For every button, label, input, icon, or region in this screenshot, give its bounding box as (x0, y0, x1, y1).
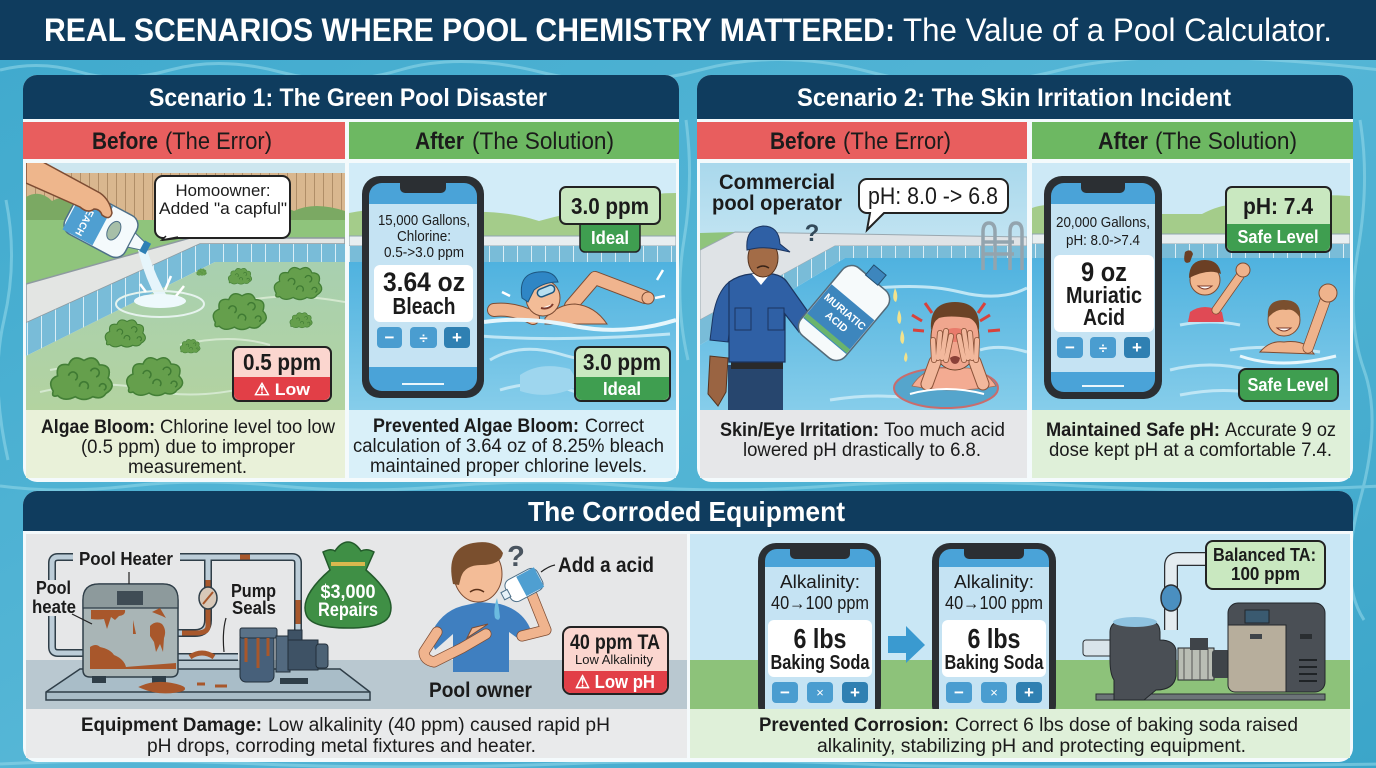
scene: kids in safe pool (1032, 163, 1350, 410)
phone: muriatic acid calculator: Acid (1083, 304, 1125, 330)
clean pipe (1161, 559, 1207, 630)
irritated swimmer (894, 302, 1000, 408)
badge: 0.5 ppm low: ⚠ Low (254, 380, 311, 399)
caption: prevented corrosion: Prevented Corrosion: (759, 715, 949, 736)
tag: 3.0 ppm ideal top (560, 187, 660, 252)
caption: skin eye irritation (700, 410, 1027, 478)
question mark: ? (805, 220, 819, 247)
tag: safe level (1239, 369, 1338, 401)
heater unit (1228, 603, 1325, 692)
before header bar (697, 122, 1027, 159)
caption: prevented corrosion: alkalinity, stabilizing pH and protecting equipment. (817, 736, 1246, 757)
icon: acid bottle in hand (497, 566, 546, 607)
phone: muriatic acid calculator (1044, 176, 1162, 399)
algae clumps (51, 267, 322, 399)
phone: baking soda 2: Baking Soda (944, 652, 1044, 674)
caption: algae bloom (26, 410, 345, 478)
after header bar: After (415, 128, 464, 155)
arrow between phones (888, 626, 925, 663)
operator figure (708, 226, 808, 410)
inlet stub (1083, 640, 1113, 656)
panel: corroded equipment (23, 491, 1353, 762)
speech bubble: pH drop (859, 179, 1008, 230)
caption: maintained safe pH: Accurate 9 oz (1225, 420, 1336, 441)
corroded pipes (52, 557, 298, 657)
caption: algae bloom: Algae Bloom: (41, 417, 155, 438)
tag: 3.0 ppm ideal bottom (575, 347, 670, 401)
phone: baking soda 1: − (780, 683, 790, 702)
phone: baking soda 1: Baking Soda (770, 652, 870, 674)
phone: chlorine calculator: Chlorine: (397, 228, 451, 245)
before header bar: (The Error) (165, 128, 272, 155)
after header bar (1032, 122, 1353, 159)
after header bar: After (1098, 128, 1148, 155)
tag: safe level: Safe Level (1248, 375, 1328, 395)
phone: baking soda 2 (932, 543, 1056, 723)
after header bar: (The Solution) (1155, 128, 1297, 155)
pump body (1110, 618, 1176, 700)
label: pool owner: Pool owner (429, 679, 532, 702)
equipment labels: Pump (231, 581, 276, 601)
caption: prevented corrosion (690, 709, 1350, 758)
icon: muriatic acid jug: MURIATIC (821, 291, 868, 333)
phone: baking soda 1: + (850, 683, 860, 702)
icon: bleach bottle (62, 202, 151, 258)
phone: muriatic acid calculator: 9 oz (1081, 257, 1127, 287)
badge: 40 ppm TA: 40 ppm TA (570, 631, 660, 654)
caption: prevented algae bloom: calculation of 3.64 oz of 8.25% bleach (353, 436, 664, 457)
icon: bleach bottle: BLEACH (72, 195, 102, 237)
acid drops (893, 288, 908, 362)
caption: equipment damage: pH drops, corroding metal fixtures and heater. (147, 736, 536, 757)
phone: chlorine calculator: 3.64 oz (383, 267, 465, 297)
phone: muriatic acid calculator: + (1132, 338, 1142, 357)
tag: balanced TA: 100 ppm (1231, 564, 1300, 584)
before header bar: Before (770, 128, 836, 155)
operator label: pool operator (712, 192, 842, 215)
before header bar: Before (92, 128, 158, 155)
badge: 40 ppm TA: Low Alkalinity (575, 652, 653, 667)
clean pump and heater (1083, 559, 1325, 700)
phone: chlorine calculator: ÷ (419, 330, 428, 347)
before header bar: (The Error) (843, 128, 951, 155)
phone: muriatic acid calculator: 20,000 Gallons, (1056, 214, 1150, 231)
caption: prevented algae bloom (349, 410, 676, 478)
caption: skin eye irritation: Too much acid (884, 420, 1005, 441)
tag: 3.0 ppm ideal top: Ideal (591, 228, 629, 248)
title banner: REAL SCENARIOS WHERE POOL CHEMISTRY MATTERED: (44, 12, 895, 48)
tag: balanced TA (1206, 541, 1325, 589)
tag: pH 7.4 safe level: pH: 7.4 (1243, 193, 1313, 219)
badge: 0.5 ppm low: 0.5 ppm (243, 349, 321, 375)
tag: 3.0 ppm ideal bottom: 3.0 ppm (583, 349, 661, 375)
caption: algae bloom: measurement. (128, 457, 247, 478)
swimmer figure (484, 270, 676, 330)
caption: equipment damage: Equipment Damage: (81, 715, 262, 736)
caption: maintained safe pH: Maintained Safe pH: (1046, 420, 1220, 441)
icon: muriatic acid jug: ACID (823, 309, 850, 335)
equipment labels: heate (32, 597, 76, 617)
after header bar (349, 122, 679, 159)
money bag: repairs (305, 542, 391, 628)
phone: baking soda 2: 40→100 ppm (945, 593, 1043, 613)
pool owner figure: ? (507, 541, 525, 573)
pouring stream and splash (116, 246, 204, 317)
caption: equipment damage (26, 709, 687, 758)
caption: prevented algae bloom: Prevented Algae Bloom: (373, 416, 579, 437)
phone: baking soda 2: 6 lbs (968, 623, 1020, 654)
valve gauge (199, 587, 217, 609)
phone: chlorine calculator: + (452, 328, 462, 347)
before scene: damaged equipment (26, 534, 687, 709)
equipment labels: Pool (36, 578, 71, 598)
equipment labels: Pool Heater (79, 549, 173, 569)
phone: muriatic acid calculator: − (1065, 338, 1075, 357)
after header bar: (The Solution) (472, 128, 614, 155)
corroded pump (240, 628, 328, 684)
phone: chlorine calculator: 15,000 Gallons, (378, 212, 470, 229)
phone: muriatic acid calculator: Muriatic (1066, 282, 1142, 308)
phone: baking soda 1: 40→100 ppm (771, 593, 869, 613)
corroded equipment heading: The Corroded Equipment (528, 496, 845, 527)
title banner (0, 0, 1376, 60)
scene: homeowner pouring into green pool (26, 161, 345, 410)
caption: algae bloom: (0.5 ppm) due to improper (81, 437, 296, 458)
tag: 3.0 ppm ideal bottom: Ideal (603, 379, 641, 399)
label: add a acid: Add a acid (558, 554, 654, 577)
icon: pool ladder (983, 223, 1022, 270)
scene: swimmer in balanced pool (349, 163, 676, 410)
title banner: The Value of a Pool Calculator. (903, 12, 1332, 48)
equipment labels: Seals (232, 598, 276, 618)
phone: baking soda 2: Alkalinity: (954, 572, 1034, 592)
tag: pH 7.4 safe level: Safe Level (1238, 227, 1318, 247)
speech bubble: pH drop: pH: 8.0 -> 6.8 (868, 183, 998, 210)
panel: scenario 1 (23, 75, 679, 482)
phone: baking soda 2: − (954, 683, 964, 702)
speech bubble: homeowner: Homoowner: (176, 181, 270, 200)
caption: prevented algae bloom: Correct (585, 416, 645, 437)
equipment labels (30, 549, 276, 652)
phone: baking soda 1 (758, 543, 881, 723)
phone: muriatic acid calculator: ÷ (1099, 340, 1107, 357)
caption: prevented algae bloom: maintained proper chlorine levels. (370, 456, 647, 477)
tag: balanced TA: Balanced TA: (1213, 545, 1316, 565)
caption: maintained safe pH: dose kept pH at a comfortable 7.4. (1049, 440, 1332, 461)
phone: muriatic acid calculator: pH: 8.0->7.4 (1066, 232, 1140, 249)
phone: baking soda 1: 6 lbs (794, 623, 846, 654)
phone: chlorine calculator (362, 176, 484, 398)
scenario 2 heading: Scenario 2: The Skin Irritation Incident (797, 84, 1232, 112)
phone: chlorine calculator: 0.5->3.0 ppm (384, 244, 464, 261)
caption: skin eye irritation: lowered pH drastically to 6.8. (743, 440, 981, 461)
phone: baking soda 1: Alkalinity: (780, 572, 860, 592)
before header bar (23, 122, 345, 159)
pool owner figure (424, 541, 546, 672)
badge: 40 ppm TA (563, 627, 668, 694)
icon: muriatic acid jug (798, 264, 890, 362)
caption: equipment damage: Low alkalinity (40 ppm) caused rapid pH (268, 715, 610, 736)
phone: baking soda 1: × (816, 685, 824, 700)
badge: 40 ppm TA: ⚠ Low pH (575, 672, 655, 692)
speech bubble: homeowner: Added "a capful" (159, 199, 287, 218)
girl waving (1184, 250, 1250, 322)
money bag: repairs: Repairs (318, 600, 378, 621)
badge: 0.5 ppm low (233, 347, 331, 401)
operator label (712, 171, 842, 215)
phone: baking soda 2: + (1024, 683, 1034, 702)
after scene: balanced equipment (690, 534, 1350, 723)
scene: operator pouring acid (700, 163, 1027, 411)
boy waving (1240, 284, 1337, 363)
tag: 3.0 ppm ideal top: 3.0 ppm (571, 193, 649, 219)
pool heater unit (83, 584, 227, 692)
caption: algae bloom: Chlorine level too low (160, 417, 335, 438)
speech bubble: homeowner (155, 176, 290, 240)
phone: chlorine calculator: − (385, 328, 395, 347)
caption: skin eye irritation: Skin/Eye Irritation: (720, 420, 879, 441)
icon: arm and hand (26, 161, 112, 218)
concrete pad (46, 669, 370, 700)
tag: pH 7.4 safe level (1226, 187, 1331, 252)
panel: scenario 2 (697, 75, 1353, 482)
phone: baking soda 2: × (990, 685, 998, 700)
caption: prevented corrosion: Correct 6 lbs dose of baking soda raised (955, 715, 1298, 736)
caption: maintained safe pH (1032, 410, 1350, 478)
operator label: Commercial (719, 171, 835, 194)
scenario 1 heading: Scenario 1: The Green Pool Disaster (149, 84, 547, 112)
phone: chlorine calculator: Bleach (392, 293, 456, 319)
money bag: repairs: $3,000 (320, 582, 376, 603)
